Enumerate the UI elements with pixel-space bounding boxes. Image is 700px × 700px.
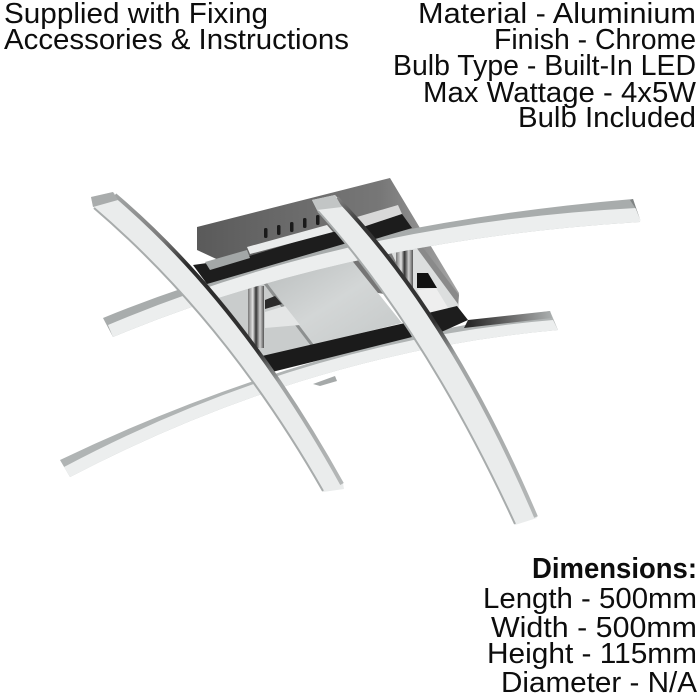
base plate side face with vents bbox=[197, 178, 459, 312]
text: fixing accessories note bbox=[4, 0, 349, 56]
text: product specifications: Bulb Type - Built-In LED bbox=[393, 50, 696, 82]
text: dimensions: Width - 500mm bbox=[491, 612, 697, 644]
support pillars bbox=[248, 250, 413, 348]
text: product specifications: Bulb Included bbox=[518, 102, 696, 134]
right curved light bar bbox=[312, 195, 537, 525]
lower dark reflection bbox=[262, 306, 552, 372]
text: dimensions: Diameter - N/A bbox=[501, 667, 698, 699]
text: dimensions: Length - 500mm bbox=[483, 583, 697, 615]
text: dimensions bbox=[483, 553, 698, 699]
upper strip and dark reflection bbox=[193, 205, 412, 284]
text: product specifications: Finish - Chrome bbox=[494, 24, 696, 56]
left curved light bar bbox=[91, 192, 344, 492]
upper light bar body bbox=[103, 199, 640, 337]
ceiling light illustration bbox=[60, 178, 641, 525]
lower light bar face bbox=[64, 320, 558, 477]
base plate chrome underside bbox=[215, 241, 459, 358]
text: product specifications: Max Wattage - 4x5W bbox=[423, 77, 697, 109]
text: dimensions: Height - 115mm bbox=[487, 638, 697, 670]
text: product specifications bbox=[393, 0, 697, 134]
upper light bar face bbox=[108, 199, 641, 337]
lower light bar body bbox=[60, 311, 558, 477]
text: fixing accessories note: Accessories & Instructions bbox=[4, 24, 349, 56]
